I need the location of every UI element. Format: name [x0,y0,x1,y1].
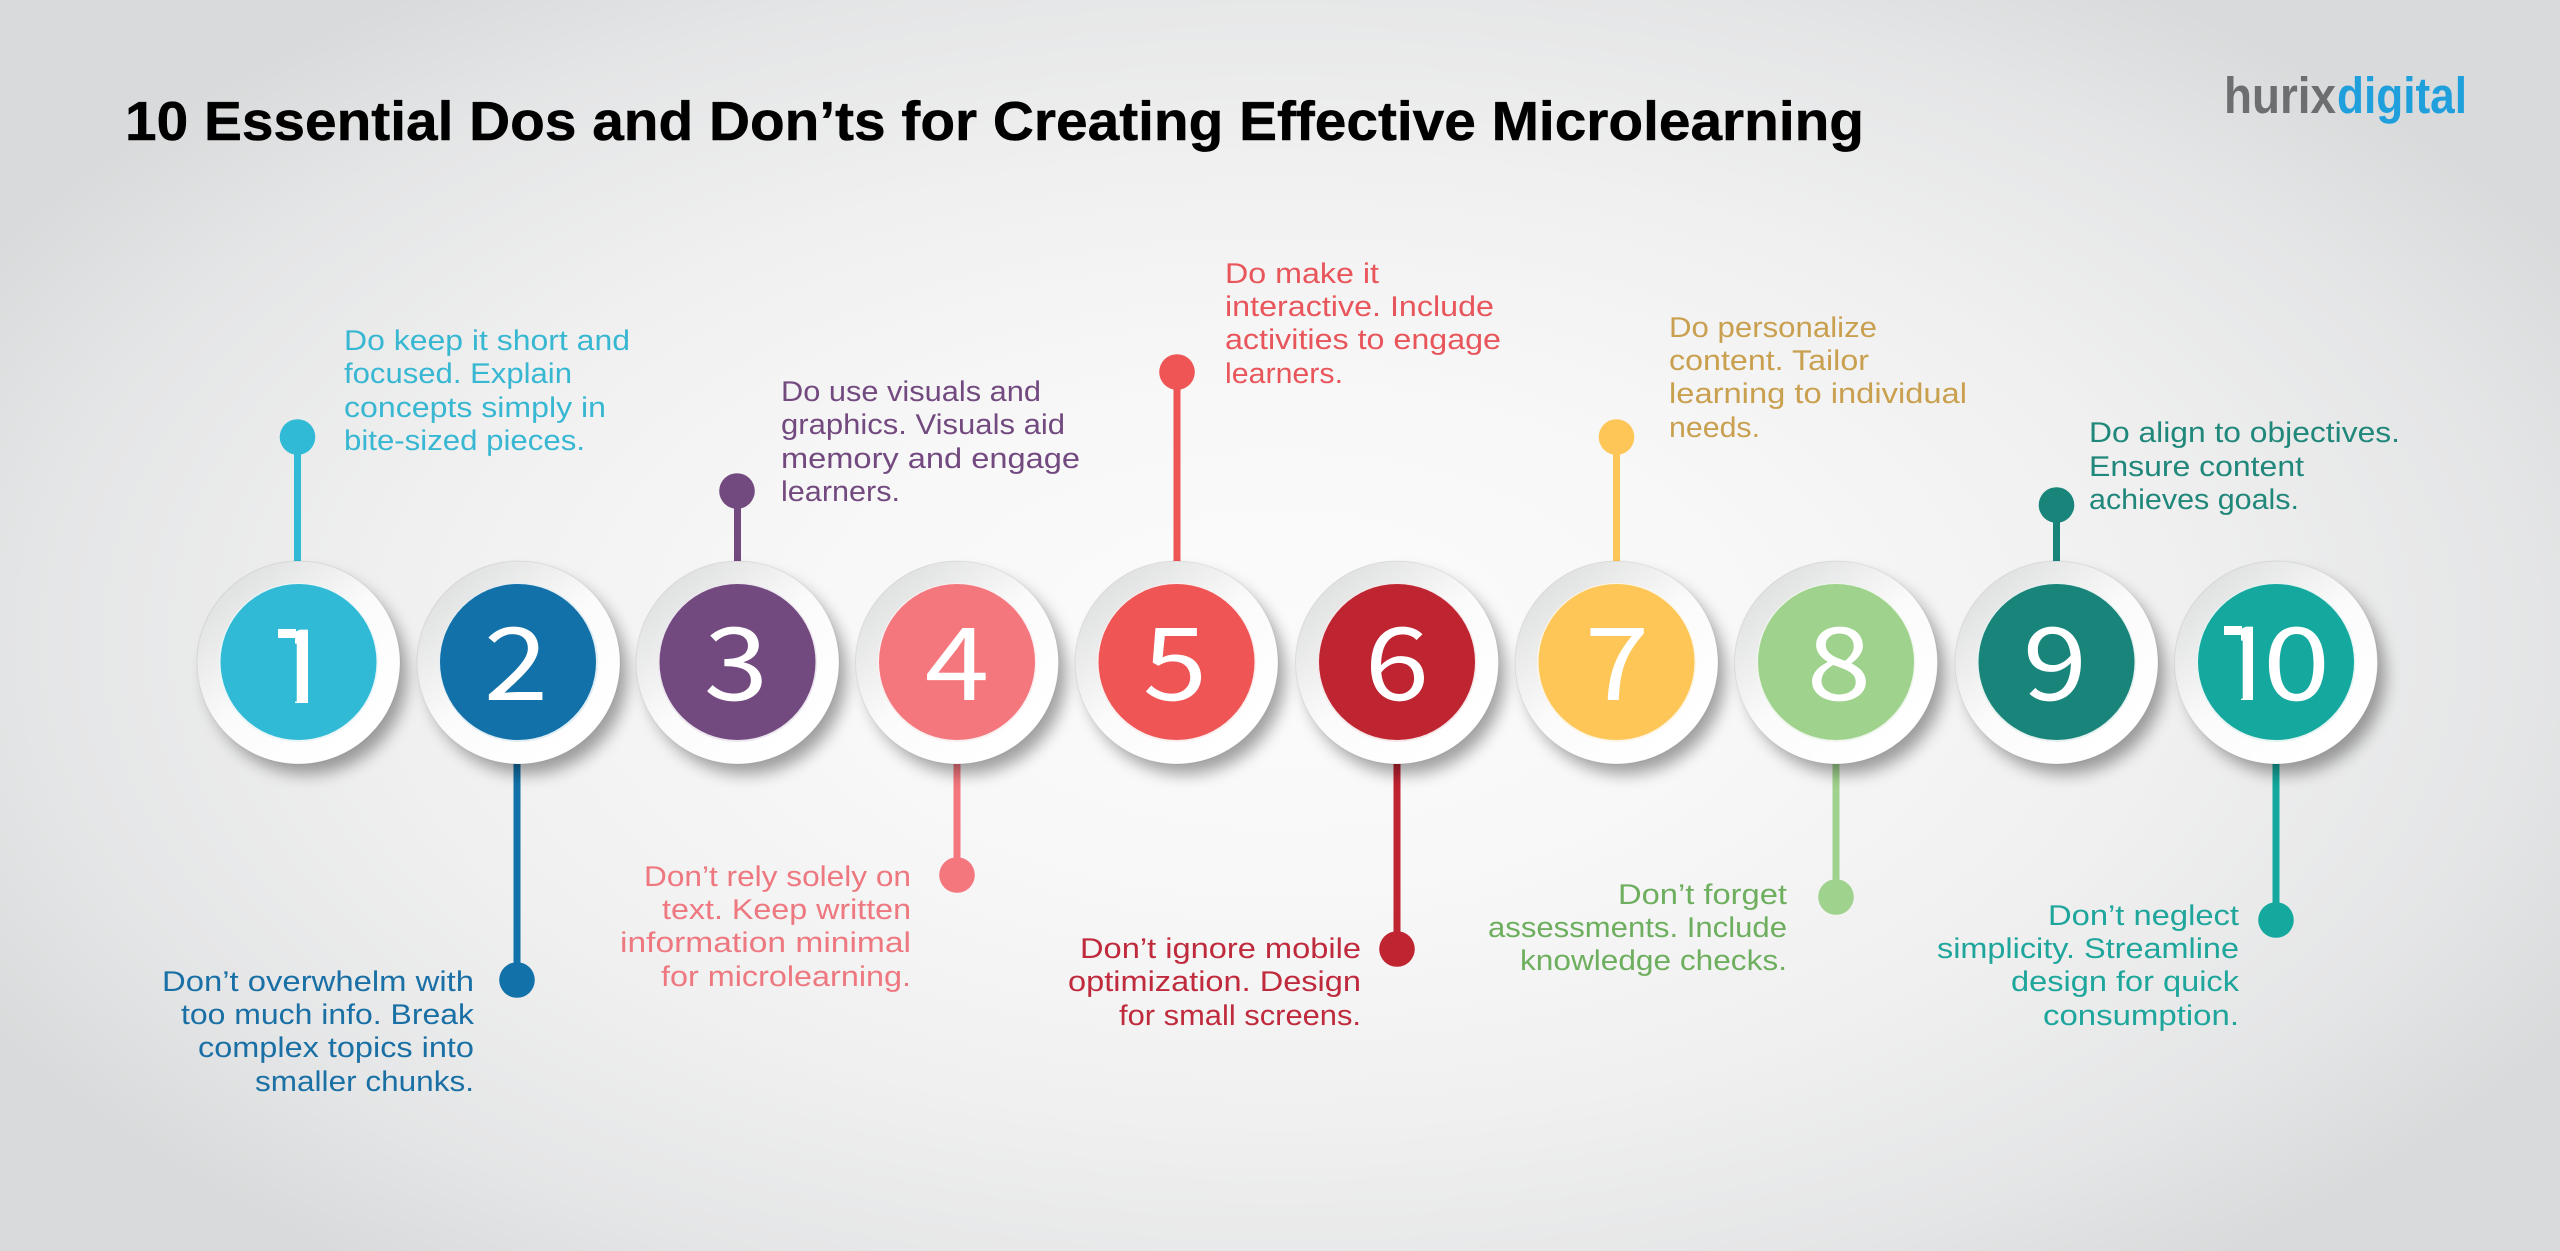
badge 9 [1955,561,2165,774]
text 7 [1669,312,1967,444]
step 7 [1515,312,1967,774]
connector 1 [280,419,315,562]
badge 9: 9 [2023,584,2087,730]
connector 3 [719,473,755,562]
text 2: Don’t overwhelm with [162,966,474,998]
text 8: assessments. Include [1488,912,1787,944]
text 8: knowledge checks. [1520,945,1787,977]
badge 8: 8 [1807,584,1871,730]
step 2 [162,561,627,1098]
badge 10: 1 [2211,578,2283,742]
text 8: Don’t forget [1618,879,1787,911]
text 6 [1068,933,1361,1032]
text 1: Do keep it short and [344,325,630,357]
badge 10: 0 [2263,584,2330,730]
text 3: learners. [781,476,900,508]
text 7: content. Tailor [1669,345,1870,377]
text 9: Ensure content [2089,451,2304,483]
text 10: consumption. [2043,1000,2239,1032]
text 7: Do personalize [1669,312,1877,344]
step 4 [620,561,1066,993]
text 6: optimization. Design [1068,966,1361,998]
badge 2 [417,561,627,774]
badge 1: 1 [265,581,337,745]
text 3 [781,376,1080,508]
badge 5 [1075,561,1285,774]
badge 4: 4 [925,584,989,730]
text 4: Don’t rely solely on [644,861,911,893]
text 10 [1937,900,2240,1032]
badge 1 [197,561,407,774]
step 10 [1937,561,2385,1032]
badge 3: 3 [704,584,768,730]
text 9: achieves goals. [2089,484,2299,516]
step 5 [1075,258,1501,774]
text 10: Don’t neglect [2048,900,2239,932]
text 3: Do use visuals and [781,376,1041,408]
connector 6 [1379,763,1415,967]
logo: hurix digital: digital [2337,67,2467,124]
title: 10 Essential Dos and Don’ts for Creating Effective Microlearning [125,90,1864,152]
text 6: for small screens. [1119,1000,1361,1032]
connector 4 [939,763,975,893]
badge 7 [1515,561,1725,774]
badge 4 [856,561,1066,774]
step 8 [1488,561,1945,977]
text 4: information minimal [620,927,911,959]
badge 5: 5 [1143,584,1207,730]
badge 2: 2 [484,584,548,730]
text 6: Don’t ignore mobile [1080,933,1361,965]
logo: hurix digital: hurix [2224,67,2336,124]
text 5: learners. [1225,358,1343,390]
text 1: focused. Explain [344,358,572,390]
text 5: interactive. Include [1225,291,1494,323]
text 4: text. Keep written [662,894,911,926]
step 1 [197,325,630,774]
text 9: Do align to objectives. [2089,417,2400,449]
text 10: design for quick [2011,966,2240,998]
text 8 [1488,879,1787,977]
text 3: graphics. Visuals aid [781,409,1065,441]
connector 10 [2258,763,2294,938]
text 5: Do make it [1225,258,1379,290]
connector 8 [1818,763,1854,915]
text 1: concepts simply in [344,392,606,424]
connector 9 [2039,487,2074,562]
text 5 [1225,258,1501,390]
step 9 [1955,417,2400,774]
badge 3 [636,561,846,774]
text 4 [620,861,911,993]
text 10: simplicity. Streamline [1937,933,2239,965]
text 3: memory and engage [781,443,1080,475]
text 4: for microlearning. [661,961,911,993]
logo: hurix digital [2224,67,2467,124]
text 1: bite-sized pieces. [344,425,585,457]
text 2: complex topics into [198,1032,474,1064]
badge 6: 6 [1365,584,1429,730]
text 1 [344,325,630,457]
badge 7: 7 [1585,584,1649,730]
step 6 [1068,561,1505,1032]
step 3 [636,376,1080,774]
text 2: too much info. Break [181,999,475,1031]
badge 8 [1734,561,1945,774]
connector 5 [1159,354,1195,562]
text 7: needs. [1669,412,1760,444]
badge 6 [1296,561,1505,774]
text 9 [2089,417,2400,516]
text 2 [162,966,475,1098]
badge 10 [2174,561,2385,774]
text 7: learning to individual [1669,378,1967,410]
connector 2 [499,763,535,998]
connector 7 [1599,419,1634,562]
text 5: activities to engage [1225,324,1501,356]
text 2: smaller chunks. [255,1066,474,1098]
